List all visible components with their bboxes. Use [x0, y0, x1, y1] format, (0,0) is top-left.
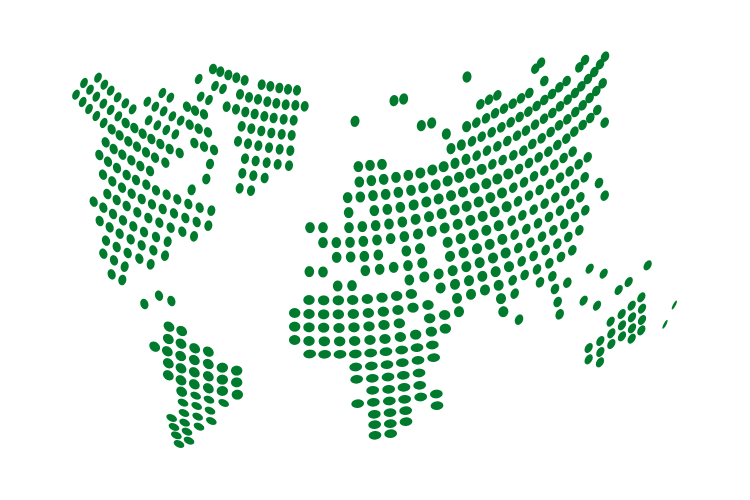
Alaska and northern Canada dots	[71, 71, 186, 174]
continent: Australia and Oceania	[578, 259, 678, 369]
Africa dots	[289, 289, 451, 440]
China and South-East Asia dots	[506, 144, 611, 326]
continent: North America	[71, 63, 310, 310]
Scandinavia and north-west Russia dots	[350, 71, 472, 170]
continent: Europe and Africa	[289, 159, 451, 440]
continent: Asia	[350, 50, 611, 326]
Western Europe and North Atlantic dots	[304, 159, 416, 291]
Middle East, India and Central Asia dots	[407, 160, 515, 318]
Siberia and Far East dots	[466, 50, 611, 171]
USA, Mexico and Central America dots	[88, 165, 216, 310]
continent: South America	[147, 319, 243, 450]
Arctic islands and Greenland dots	[182, 63, 310, 197]
